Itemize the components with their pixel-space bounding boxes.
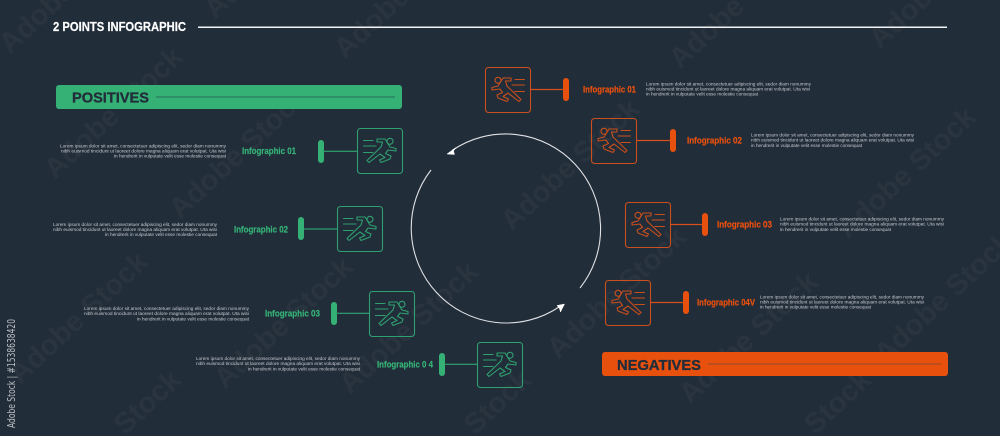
description: Lorem ipsum dolor sit amet, consectetuer adipiscing elit, sedor diam nonummy	[780, 216, 945, 222]
circular arrows	[411, 134, 601, 323]
description: Lorem ipsum dolor sit amet, consectetuer adipiscing elit, sedor diam nonummy	[196, 356, 361, 361]
description: in hendrerit in vulputate velit esse molestie consequat	[760, 304, 872, 310]
connector	[318, 140, 357, 163]
label: Infographic 03	[717, 220, 772, 230]
label: Infographic 02	[234, 224, 288, 234]
description	[760, 294, 925, 310]
negative item 04	[606, 280, 925, 326]
negative item 03	[626, 202, 945, 248]
description: nibh euismod tincidunt ut laoreet dolore magna aliquam erat volutpat. Uta wisi	[760, 300, 924, 304]
description: Lorem ipsum dolor sit amet, consectetuer adipiscing elit, sedor diam nonummy	[751, 132, 915, 138]
connector	[651, 291, 689, 314]
arrow: lower arc	[411, 170, 564, 323]
connector	[298, 217, 337, 240]
watermark pattern: Adobe Stock	[38, 40, 190, 185]
icon: runner	[370, 292, 414, 336]
description: Lorem ipsum dolor sit amet, consectetuer adipiscing elit, sedor diam nonummy	[760, 294, 925, 300]
positive item 02	[53, 206, 382, 252]
negative item 02	[592, 118, 915, 164]
watermark pattern: Adobe Stock	[673, 265, 825, 410]
description	[60, 144, 227, 158]
description: in hendrerit in vulputate velit esse molestie consequat	[105, 232, 218, 237]
icon: runner	[486, 68, 530, 112]
description	[646, 82, 812, 96]
description: in hendrerit in vulputate velit esse molestie consequat	[751, 143, 863, 148]
icon: runner	[478, 342, 522, 388]
description	[84, 306, 250, 322]
connector	[331, 302, 370, 325]
label: Infographic 02	[687, 136, 742, 146]
description: in hendrerit in vulputate velit esse molestie consequat	[114, 154, 227, 158]
description: in hendrerit in vulputate velit esse molestie consequat	[137, 316, 250, 322]
connector	[439, 353, 477, 376]
watermark pattern: Adobe Stock	[333, 255, 485, 400]
description: Lorem ipsum dolor sit amet, consectetuer adipiscing elit, sedor diam nonummy	[60, 144, 227, 148]
positive item 04	[196, 342, 522, 388]
description	[53, 222, 218, 237]
watermark pattern: Adobe Stock	[541, 220, 693, 365]
label: Infographic 0 4	[377, 360, 433, 370]
panel: positives banner	[56, 85, 402, 109]
label: Infographic 04V	[697, 298, 755, 308]
description: Lorem ipsum dolor sit amet, consectetuer adipiscing elit, sedor diam nonummy	[53, 222, 218, 227]
description: nibh euismod tincidunt ut laoreet dolore magna aliquam erat volutpat. Uta wisi	[196, 361, 360, 366]
description: nibh euismod tincidunt ut laoreet dolore magna aliquam erat volutpat. Uta wisi	[61, 148, 226, 154]
connector	[637, 129, 676, 152]
label: Infographic 01	[583, 84, 636, 94]
description: Lorem ipsum dolor sit amet, consectetuer adipiscing elit, sedor diam nonummy	[646, 82, 812, 86]
watermark pattern: Adobe Stock	[495, 92, 647, 237]
panel: negatives banner	[602, 352, 948, 376]
description	[751, 132, 915, 148]
description: nibh euismod tincidunt ut laoreet dolore magna aliquam erat volutpat. Uta wisi	[84, 311, 249, 316]
connector	[670, 213, 708, 236]
watermark pattern: Adobe Stock	[3, 245, 155, 390]
heading: positives: POSITIVES	[72, 90, 149, 106]
watermark pattern: Adobe Stock	[831, 100, 983, 245]
label: Infographic 01	[242, 146, 296, 156]
description: in hendrerit in vulputate velit esse molestie consequat	[248, 366, 361, 372]
connector	[530, 78, 569, 101]
stock id: Adobe Stock | #1538638420	[5, 319, 18, 428]
description: nibh euismod tincidunt ut laoreet dolore magna aliquam erat volutpat. Uta wisi	[751, 138, 914, 142]
description	[780, 216, 945, 232]
description: in hendrerit in vulputate velit esse molestie consequat	[780, 227, 892, 232]
heading: negatives: NEGATIVES	[617, 357, 701, 374]
positive item 01	[60, 128, 402, 174]
watermark pattern: Adobe Stock	[208, 250, 360, 395]
title rule	[198, 26, 947, 28]
description: nibh euismod tincidunt ut laoreet dolore magna aliquam erat volutpat. Uta wisi	[646, 86, 810, 92]
title: 2 POINTS INFOGRAPHIC	[53, 20, 186, 34]
icon: runner	[592, 118, 636, 164]
icon: runner	[358, 128, 402, 174]
description: nibh euismod tincidunt ut laoreet dolore magna aliquam erat volutpat. Uta wisi	[780, 222, 944, 226]
description	[196, 356, 361, 372]
positive item 03	[84, 292, 414, 336]
icon: runner	[606, 280, 650, 326]
description: Lorem ipsum dolor sit amet, consectetuer adipiscing elit, sedor diam nonummy	[84, 306, 250, 311]
icon: runner	[338, 206, 382, 252]
label: Infographic 03	[265, 308, 320, 318]
arrow: upper arc	[447, 134, 601, 288]
icon: runner	[626, 202, 670, 248]
negative item 01	[486, 68, 812, 112]
description: nibh euismod tincidunt ut laoreet dolore magna aliquam erat volutpat. Uta wisi	[53, 227, 217, 232]
watermark pattern: Adobe Stock	[163, 80, 315, 225]
description: in hendrerit in vulputate velit esse molestie consequat	[646, 92, 759, 96]
